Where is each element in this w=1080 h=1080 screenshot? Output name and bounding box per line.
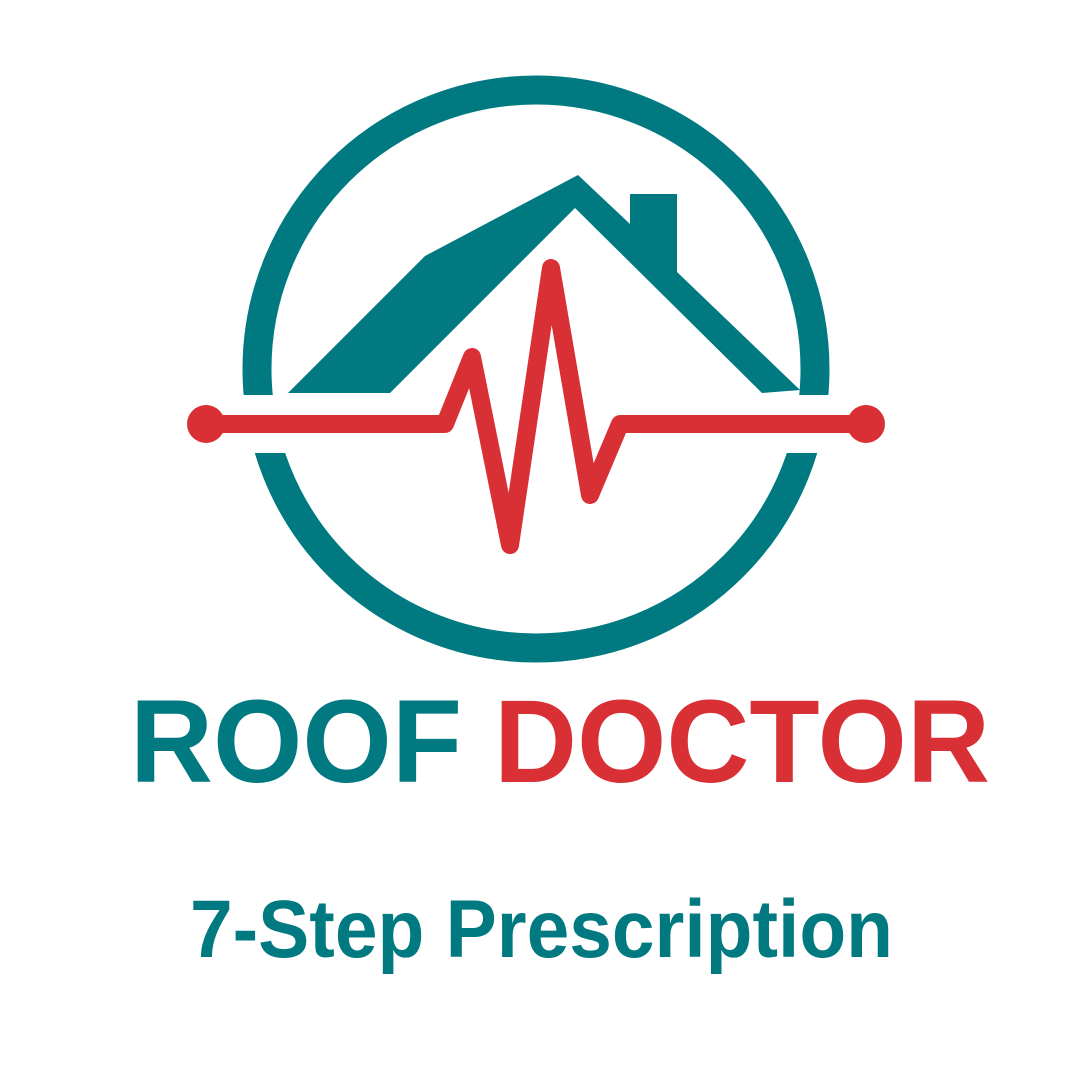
subtitle: 7-Step Prescription: 7-Step Prescription	[190, 884, 893, 975]
logo emblem	[187, 90, 885, 648]
ring	[220, 90, 860, 648]
title: ROOF DOCTOR: ROOF DOCTOR	[130, 676, 990, 808]
icon: heartbeat line	[187, 268, 885, 545]
icon: house roof with chimney	[288, 175, 800, 393]
